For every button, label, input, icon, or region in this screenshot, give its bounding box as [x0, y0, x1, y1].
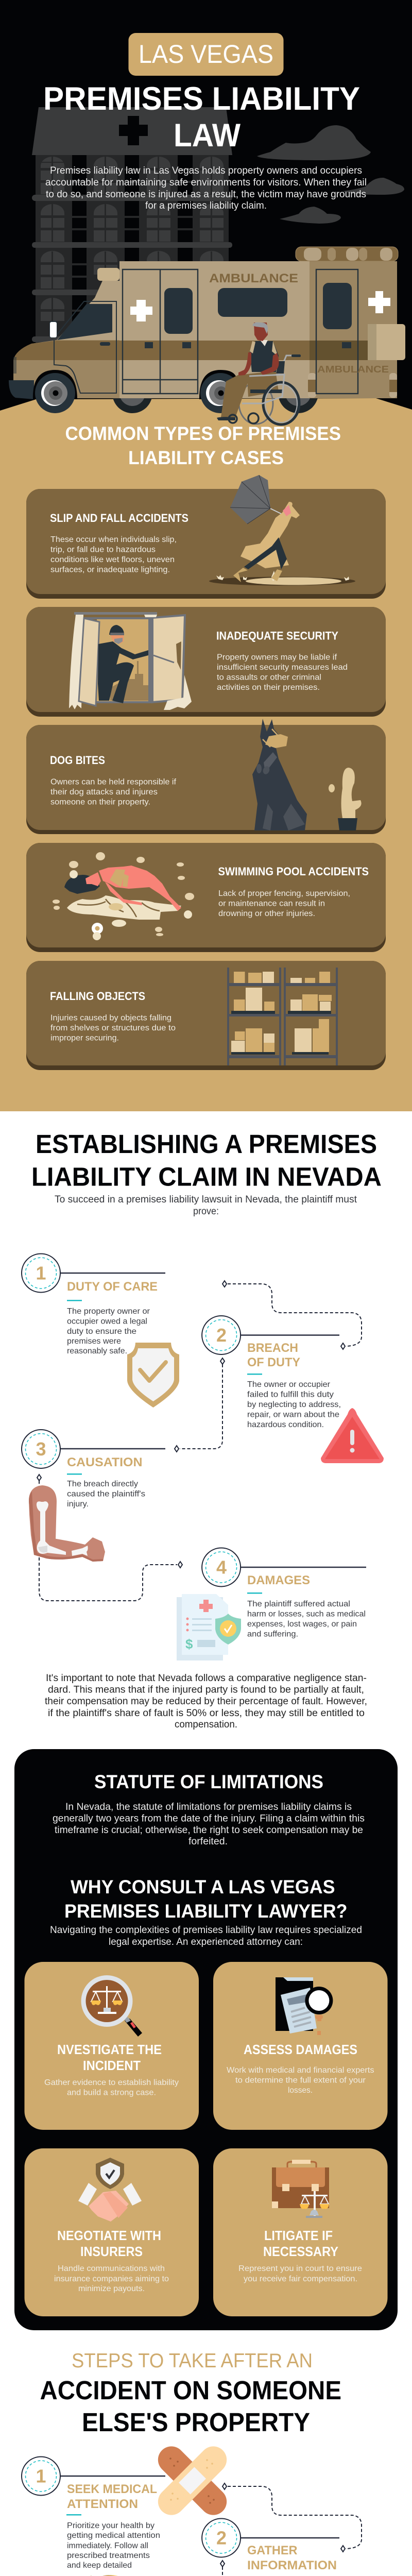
panel: dog bites: [26, 719, 386, 834]
icon: warehouse shelves with boxes: [227, 968, 338, 1065]
text: falling objects: improper securing.: [50, 1033, 119, 1043]
heading: damages: DAMAGES: [247, 1573, 310, 1587]
text: statute of limitations: [53, 1802, 365, 1847]
intro text: to do so, and someone is injured as a result, the victim may have grounds: [46, 189, 366, 200]
text: breach of duty: by neglecting to address,: [247, 1400, 341, 1409]
text: causation: The breach directly: [67, 1480, 138, 1488]
text: inadequate security: to assaults or other criminal: [217, 673, 321, 682]
text: causation: caused the plaintiff's: [67, 1490, 145, 1498]
heading: litigate if necessary: NECESSARY: [263, 2244, 338, 2259]
icon: crossed bandages: [152, 2441, 232, 2520]
text: swimming pool: [218, 889, 350, 918]
text: slip and fall: trip, or fall due to hazardous: [50, 545, 156, 554]
text: seek medical attention: immediately. Follow all: [67, 2541, 148, 2550]
text: damages: [247, 1600, 366, 1638]
panel: hero: [0, 0, 412, 412]
heading: swimming pool: SWIMMING POOL ACCIDENTS: [218, 865, 369, 878]
step: damages: [202, 1548, 366, 1638]
step: seek medical attention: [22, 2456, 165, 2570]
step: breach of duty: 2: [216, 1325, 227, 1346]
icon: medical bill with shield: $: [185, 1636, 193, 1652]
heading: why consult: PREMISES LIABILITY LAWYER?: [64, 1901, 347, 1922]
title: PREMISES LIABILITY: [43, 81, 360, 117]
text: duty of care: occupier owed a legal: [67, 1317, 147, 1326]
text: slip and fall: surfaces, or inadequate lighting.: [50, 566, 170, 574]
heading: negotiate with insurers: INSURERS: [80, 2244, 143, 2259]
text: swimming pool: drowning or other injuries.: [218, 909, 315, 918]
heading: breach of duty: [247, 1341, 300, 1369]
text: why consult: legal expertise. An experienced attorney can:: [109, 1937, 303, 1947]
dashed connectors: claim elements: [37, 1281, 362, 1601]
ambulance illustration: [9, 247, 405, 425]
text: dog bites: Owners can be held responsible if: [50, 778, 177, 786]
text: investigate the incident: [44, 2078, 179, 2097]
text: damages: The plaintiff suffered actual: [247, 1600, 350, 1608]
heading: seek medical attention: ATTENTION: [67, 2497, 138, 2511]
heading: common types: [65, 423, 341, 468]
text: comparative negligence: [45, 1673, 367, 1730]
text: assess damages: to determine the full extent of your: [235, 2076, 366, 2084]
icon: briefcase with scales: [272, 2160, 329, 2218]
man in wheelchair: [217, 323, 301, 425]
text: statute of limitations: forfeited.: [188, 1836, 228, 1847]
icon: document with magnifier: [276, 1977, 333, 2035]
heading: seek medical attention: SEEK MEDICAL: [67, 2482, 157, 2496]
text: seek medical attention: [67, 2521, 160, 2570]
heading: steps to take: [40, 2350, 341, 2437]
text: claim intro: To succeed in a premises liability lawsuit in Nevada, the plaintiff must: [55, 1194, 357, 1205]
panel: falling objects: [26, 961, 386, 1070]
heading: litigate if necessary: LITIGATE IF: [264, 2228, 333, 2243]
step: breach of duty: [202, 1316, 341, 1429]
panel: common types background: [0, 398, 412, 1111]
plant: [329, 768, 362, 831]
heading: negotiate with insurers: NEGOTIATE WITH: [57, 2228, 161, 2243]
text: dog bites: someone on their property.: [50, 798, 150, 807]
text: duty of care: duty to ensure the: [67, 1327, 136, 1336]
text: negotiate with insurers: [54, 2264, 169, 2293]
heading: breach of duty: BREACH: [247, 1341, 298, 1355]
heading: establishing a claim: ESTABLISHING A PREMISES: [36, 1129, 377, 1159]
text: inadequate security: activities on their premises.: [217, 683, 320, 692]
heading: inadequate security: INADEQUATE SECURITY: [216, 630, 338, 642]
icon: arm with bone: [29, 1485, 105, 1562]
text: negotiate with insurers: Handle communications with: [58, 2264, 165, 2273]
title: LAW: [174, 117, 241, 154]
text: inadequate security: Property owners may be liable if: [217, 653, 337, 662]
text: inadequate security: [217, 653, 348, 692]
heading: why consult: WHY CONSULT A LAS VEGAS: [71, 1876, 335, 1897]
heading: statute of limitations: STATUTE OF LIMITATIONS: [94, 1771, 323, 1792]
step: duty of care: [22, 1254, 165, 1355]
icon: medical bill with shield: [177, 1594, 241, 1660]
heading: causation: CAUSATION: [67, 1455, 142, 1469]
text: statute of limitations: timeframe is crucial; otherwise, the right to seek compensation may be: [55, 1825, 363, 1836]
text: comparative negligence: It's important to note that Nevada follows a comparative negligence stan-: [46, 1673, 367, 1684]
step: causation: [22, 1430, 165, 1509]
step: damages: 4: [216, 1557, 227, 1578]
icon: woman floating in pool: [53, 852, 194, 940]
text: assess damages: losses.: [288, 2086, 313, 2095]
text: damages: and suffering.: [247, 1630, 298, 1638]
heading: establishing a claim: [31, 1129, 382, 1191]
text: swimming pool: Lack of proper fencing, supervision,: [218, 889, 350, 898]
text: seek medical attention: Prioritize your health by: [67, 2521, 154, 2530]
text: statute of limitations: generally two years from the date of the injury. Filing a claim within this: [53, 1814, 365, 1824]
icon: person slipping with umbrella: [209, 475, 355, 585]
icon: hospital cross: [119, 116, 148, 145]
heading: falling objects: FALLING OBJECTS: [50, 990, 145, 1003]
text: why consult: [50, 1925, 362, 1947]
heading: investigate the incident: INCIDENT: [83, 2058, 141, 2073]
text: statute of limitations: In Nevada, the statute of limitations for premises liability claims is: [65, 1802, 352, 1812]
heading: slip and fall: SLIP AND FALL ACCIDENTS: [50, 512, 188, 524]
icon: warning triangle: [321, 1408, 384, 1463]
heading: dog bites: DOG BITES: [50, 754, 105, 767]
card: assess damages: [213, 1962, 387, 2130]
text: dog bites: their dog attacks and injures: [50, 788, 158, 796]
text: breach of duty: [247, 1380, 341, 1429]
heading: investigate the incident: [57, 2042, 162, 2073]
heading: steps to take: ACCIDENT ON SOMEONE: [40, 2376, 341, 2405]
text: swimming pool: or maintenance can result in: [218, 900, 325, 908]
clouds: [257, 125, 404, 224]
text: negotiate with insurers: minimize payouts.: [78, 2284, 145, 2293]
text: slip and fall: [50, 535, 177, 574]
text: seek medical attention: and keep detailed: [67, 2561, 132, 2570]
intro text: Premises liability law in Las Vegas holds property owners and occupiers: [50, 165, 362, 176]
text: why consult: Navigating the complexities of premises liability law requires specialized: [50, 1925, 362, 1936]
text: investigate the incident: Gather evidence to establish liability: [44, 2078, 179, 2087]
text: breach of duty: hazardous condition.: [247, 1420, 324, 1429]
ambulance illustration: AMBULANCE: [317, 364, 389, 375]
text: causation: injury.: [67, 1500, 89, 1509]
text: comparative negligence: compensation.: [175, 1719, 237, 1730]
text: inadequate security: insufficient security measures lead: [217, 663, 348, 672]
text: causation: [67, 1480, 145, 1509]
ambulance lettering: AMBULANCE: [209, 272, 298, 285]
text: negotiate with insurers: insurance companies aiming to: [54, 2275, 169, 2283]
step: causation: 3: [36, 1438, 46, 1460]
text: breach of duty: failed to fulfill this duty: [247, 1390, 334, 1399]
heading: gather information: GATHER: [247, 2544, 298, 2557]
intro text: for a premises liability claim.: [145, 200, 267, 211]
heading: why consult: [64, 1876, 347, 1922]
panel: statute of limitations and why consult: [14, 1749, 398, 2330]
text: assess damages: [227, 2066, 374, 2095]
text: falling objects: [50, 1014, 176, 1043]
heading: negotiate with insurers: [57, 2228, 161, 2259]
heading: steps to take: ELSE'S PROPERTY: [82, 2408, 310, 2437]
step: duty of care: 1: [36, 1262, 46, 1284]
text: litigate if necessary: you receive fair compensation.: [244, 2275, 357, 2283]
icon: phone with medical bubble: [61, 2575, 130, 2576]
dashed connectors: steps: [37, 2483, 362, 2576]
heading: seek medical attention: [67, 2482, 157, 2511]
intro text: accountable for maintaining safe environments for visitors. When they fail: [45, 177, 367, 188]
heading: steps to take: STEPS TO TAKE AFTER AN: [72, 2350, 313, 2372]
text: slip and fall: conditions like wet floors, uneven: [50, 555, 175, 564]
text: duty of care: The property owner or: [67, 1307, 150, 1316]
text: claim intro: prove:: [193, 1206, 219, 1217]
heading: assess damages: ASSESS DAMAGES: [244, 2042, 357, 2057]
text: comparative negligence: if the plaintiff's share of fault is 50% or less, they may still be entitled to: [48, 1708, 365, 1719]
step: seek medical attention: 1: [36, 2466, 46, 2486]
intro text: [45, 165, 367, 211]
text: falling objects: from shelves or structures due to: [50, 1024, 176, 1032]
panel: inadequate security: [26, 607, 386, 717]
card: litigate if necessary: [213, 2148, 387, 2316]
text: dog bites: [50, 778, 177, 807]
heading: gather information: [247, 2544, 337, 2572]
heading: establishing a claim: LIABILITY CLAIM IN NEVADA: [31, 1162, 382, 1191]
text: assess damages: Work with medical and financial experts: [227, 2066, 374, 2075]
icon: handshake with shield: [78, 2158, 142, 2222]
text: claim intro: [55, 1194, 357, 1217]
title: [43, 81, 360, 154]
heading: common types: COMMON TYPES OF PREMISES: [65, 423, 341, 444]
heading: gather information: INFORMATION: [247, 2558, 337, 2572]
text: breach of duty: repair, or warn about the: [247, 1411, 339, 1419]
text: litigate if necessary: [238, 2264, 362, 2283]
text: litigate if necessary: Represent you in court to ensure: [238, 2264, 362, 2273]
heading: investigate the incident: NVESTIGATE THE: [57, 2042, 162, 2057]
text: falling objects: Injuries caused by objects falling: [50, 1014, 171, 1022]
heading: duty of care: DUTY OF CARE: [67, 1280, 158, 1294]
text: duty of care: reasonably safe.: [67, 1347, 127, 1355]
text: seek medical attention: prescribed treatments: [67, 2551, 150, 2560]
step: gather information: [202, 2518, 341, 2576]
title badge: [129, 33, 283, 76]
text: comparative negligence: dard. This means that if the injured party is found to be partially at fault,: [48, 1685, 364, 1695]
text: slip and fall: These occur when individuals slip,: [50, 535, 177, 544]
icon: muzzled dog: [252, 719, 362, 831]
card: negotiate with insurers: [25, 2148, 199, 2316]
heading: breach of duty: OF DUTY: [247, 1355, 300, 1369]
heading: litigate if necessary: [263, 2228, 338, 2259]
text: duty of care: [67, 1307, 150, 1355]
step: gather information: 2: [216, 2528, 227, 2548]
text: duty of care: premises were: [67, 1337, 121, 1346]
text: damages: expenses, lost wages, or pain: [247, 1620, 357, 1629]
text: damages: harm or losses, such as medical: [247, 1609, 366, 1619]
icon: burglar at window: [69, 612, 192, 710]
title badge: LAS VEGAS: [139, 40, 273, 69]
heading: common types: LIABILITY CASES: [128, 447, 284, 468]
card: investigate the incident: [25, 1962, 199, 2130]
text: comparative negligence: their compensation may be reduced by their percentage of fault. However,: [45, 1696, 367, 1707]
panel: swimming pool accidents: [26, 843, 386, 952]
icon: magnifier with scales: [81, 1975, 142, 2037]
text: breach of duty: The owner or occupier: [247, 1380, 331, 1389]
icon: shield with check: [127, 1343, 179, 1408]
panel: slip and fall: [26, 475, 386, 599]
text: investigate the incident: and build a strong case.: [67, 2089, 156, 2097]
hospital building: [32, 107, 232, 382]
text: seek medical attention: getting medical attention: [67, 2531, 160, 2540]
